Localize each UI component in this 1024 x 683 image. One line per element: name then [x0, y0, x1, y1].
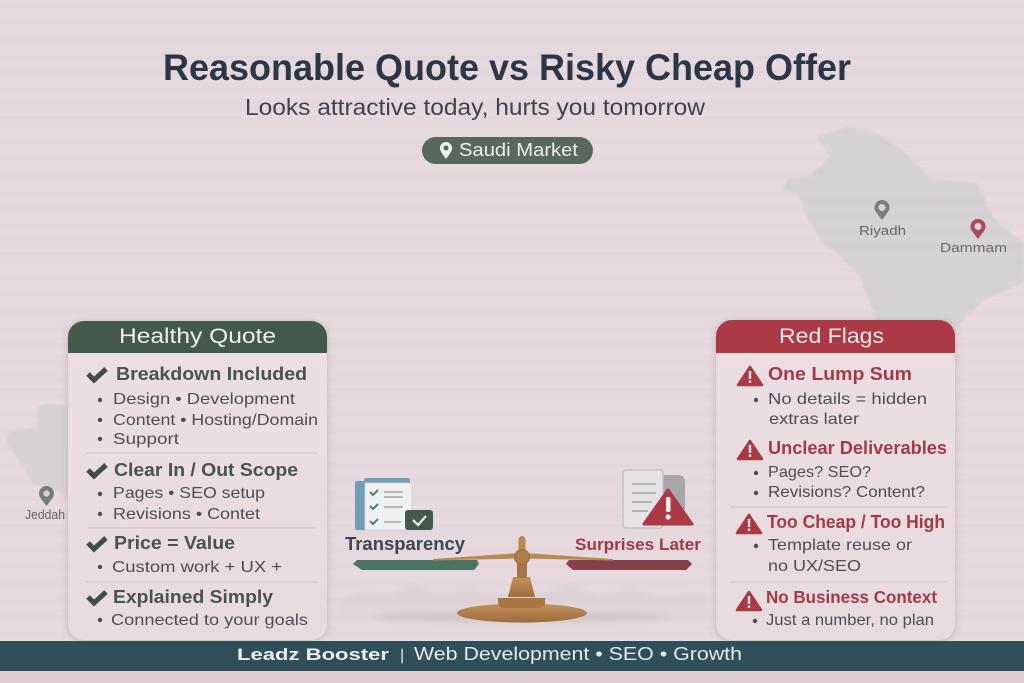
item: One Lump Sum	[738, 363, 927, 428]
footer bar	[0, 641, 1024, 671]
item: No Business Context: Just a number, no plan	[766, 612, 934, 629]
icon: surprise document with warning	[623, 470, 692, 528]
item: Too Cheap / Too High: Too Cheap / Too High	[767, 511, 945, 532]
item: Unclear Deliverables	[738, 437, 947, 501]
item: Too Cheap / Too High: no UX/SEO	[768, 558, 861, 575]
item: Explained Simply: Connected to your goals	[111, 612, 308, 629]
item: Explained Simply	[88, 586, 308, 629]
bottom strip	[0, 671, 1024, 683]
label: Riyadh: Riyadh	[859, 224, 906, 238]
item: Breakdown Included: Content • Hosting/Domain	[113, 412, 318, 429]
item: Clear In / Out Scope: Pages • SEO setup	[113, 485, 265, 502]
item: Price = Value: Price = Value	[114, 532, 235, 553]
item: Clear In / Out Scope: Clear In / Out Scope	[114, 459, 298, 480]
panel header	[716, 320, 955, 353]
item: Breakdown Included: Breakdown Included	[116, 363, 307, 384]
title: Reasonable Quote vs Risky Cheap Offer	[163, 47, 851, 88]
item: One Lump Sum: No details = hidden	[768, 391, 927, 408]
item: Breakdown Included: Support	[113, 431, 180, 448]
item: Unclear Deliverables: Pages? SEO?	[768, 464, 871, 481]
post	[518, 536, 526, 552]
base block	[498, 598, 545, 608]
footer tagline: Web Development • SEO • Growth	[414, 644, 742, 664]
item: One Lump Sum: extras later	[769, 411, 860, 428]
icon: transparency checklist	[355, 478, 433, 530]
label: Surprises Later: Surprises Later	[575, 535, 701, 554]
item: Breakdown Included	[88, 363, 318, 448]
label: Jeddah: Jeddah	[25, 508, 65, 522]
left pan	[353, 560, 479, 570]
footer brand: Leadz Booster	[237, 645, 389, 664]
item: Clear In / Out Scope: Revisions • Contet	[113, 506, 261, 523]
map: Saudi Arabia west	[5, 403, 70, 522]
panel heading: Red Flags	[779, 325, 884, 348]
item: Price = Value: Custom work + UX +	[112, 559, 282, 576]
panel header	[68, 321, 327, 353]
column	[508, 577, 535, 597]
item: Too Cheap / Too High	[737, 511, 945, 575]
panel: Healthy Quote	[68, 321, 327, 640]
pin: Riyadh	[874, 200, 890, 220]
label: Transparency: Transparency	[345, 534, 465, 554]
footer separator: |	[400, 647, 404, 664]
item: Clear In / Out Scope	[88, 459, 298, 523]
item: Unclear Deliverables: Unclear Deliverables	[768, 437, 947, 458]
balance scale	[353, 536, 692, 622]
item: Explained Simply: Explained Simply	[113, 586, 274, 607]
item: Unclear Deliverables: Revisions? Content?	[768, 484, 925, 501]
right pan	[566, 560, 692, 570]
item: Price = Value	[88, 532, 282, 576]
item: Breakdown Included: Design • Development	[113, 391, 296, 408]
map: Saudi Arabia east	[783, 127, 1024, 330]
badge label: Saudi Market	[459, 140, 578, 160]
base disk	[457, 604, 587, 622]
pivot	[514, 550, 530, 564]
pin: Dammam	[970, 219, 986, 239]
badge: Saudi Market	[422, 137, 593, 164]
panel: Red Flags	[716, 320, 955, 640]
label: Dammam: Dammam	[940, 241, 1007, 255]
pin: Jeddah	[39, 486, 54, 506]
subtitle: Looks attractive today, hurts you tomorrow	[245, 94, 705, 120]
panel heading: Healthy Quote	[119, 325, 276, 348]
item: One Lump Sum: One Lump Sum	[768, 363, 912, 384]
item: No Business Context: No Business Context	[766, 587, 937, 607]
icon: location pin	[440, 142, 452, 159]
item: Too Cheap / Too High: Template reuse or	[768, 537, 913, 554]
hazy landscape	[336, 586, 708, 632]
item: No Business Context	[737, 587, 937, 629]
beam	[433, 553, 613, 560]
